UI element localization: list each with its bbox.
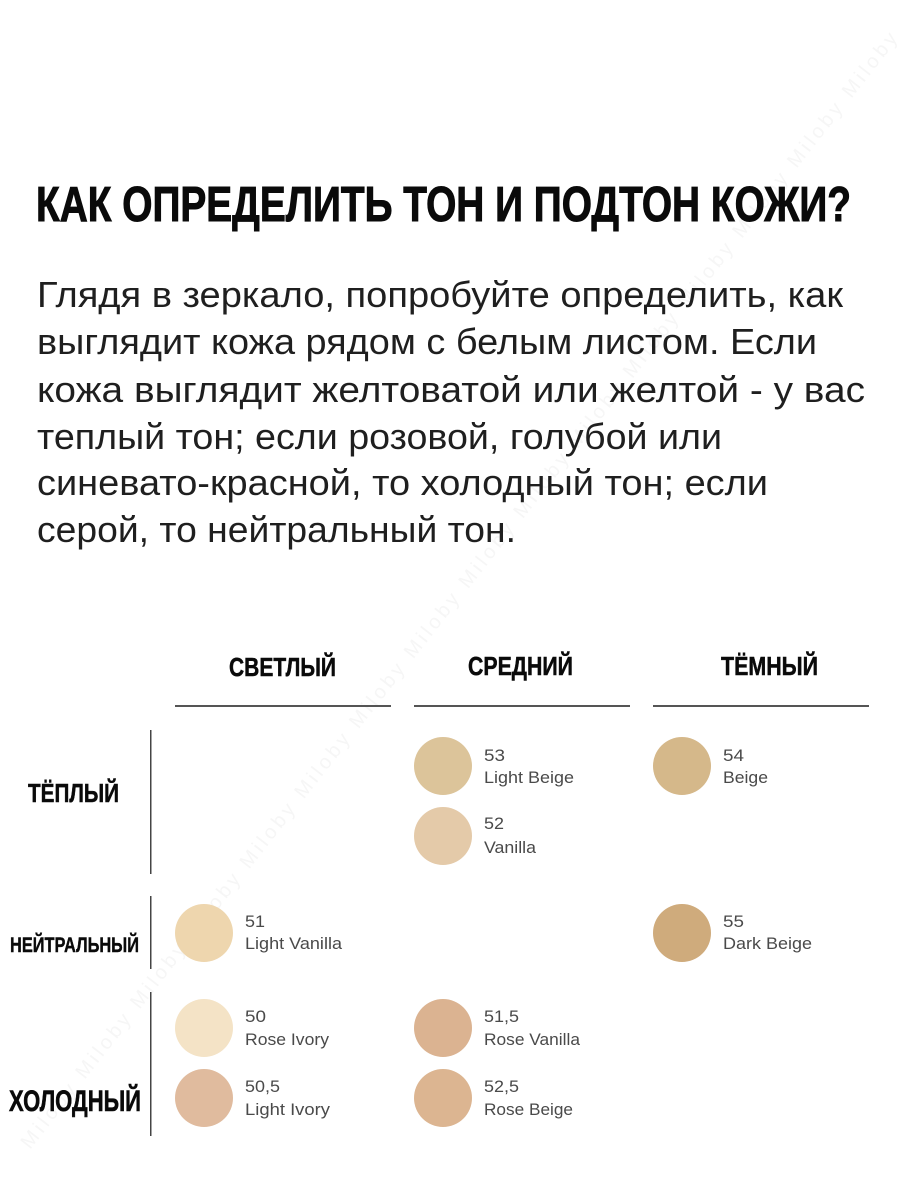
row header: холодный: ХОЛОДНЫЙ	[9, 1084, 141, 1118]
intro text block	[37, 274, 865, 550]
swatch: 53 Light Beige: 53	[484, 746, 505, 765]
swatch: 51,5 Rose Vanilla: 51,5	[484, 1007, 519, 1026]
swatch: 54 Beige	[653, 737, 768, 795]
swatch: 52 Vanilla: 52	[484, 814, 504, 833]
swatch: 51 Light Vanilla: 51	[245, 912, 265, 931]
swatch: 55 Dark Beige: Dark Beige	[723, 934, 812, 953]
intro text block: серой, то нейтральный тон.	[37, 509, 516, 550]
swatch: 50 Rose Ivory: 50	[245, 1007, 266, 1026]
intro text block: синевато-красной, то холодный тон; если	[37, 462, 768, 503]
swatch: 52 Vanilla: Vanilla	[484, 838, 537, 857]
swatch: 52,5 Rose Beige: 52,5	[484, 1077, 519, 1096]
intro text block: теплый тон; если розовой, голубой или	[37, 416, 722, 457]
swatch: 50,5 Light Ivory	[175, 1069, 331, 1127]
swatch: 51,5 Rose Vanilla: Rose Vanilla	[484, 1030, 581, 1049]
swatch: 53 Light Beige	[414, 737, 574, 795]
watermark: Miloby Miloby Miloby Miloby Miloby Miloby Miloby Miloby Miloby Miloby Miloby Miloby Miloby Miloby Miloby Miloby	[17, 28, 900, 1153]
swatch: 51 Light Vanilla	[175, 904, 343, 962]
swatch: 54 Beige: 54	[723, 746, 744, 765]
swatch: 50 Rose Ivory: Rose Ivory	[245, 1030, 330, 1049]
swatch: 50,5 Light Ivory: Light Ivory	[245, 1100, 331, 1119]
intro text block: Глядя в зеркало, попробуйте определить, как	[37, 274, 843, 315]
intro text block: кожа выглядит желтоватой или желтой - у вас	[37, 369, 865, 410]
row header: тёплый: ТЁПЛЫЙ	[28, 778, 119, 808]
intro text block: выглядит кожа рядом с белым листом. Если	[37, 321, 817, 362]
swatch: 51 Light Vanilla: Light Vanilla	[245, 934, 343, 953]
column header: средний: СРЕДНИЙ	[468, 651, 573, 681]
column header: светлый: СВЕТЛЫЙ	[229, 652, 336, 682]
swatch: 52,5 Rose Beige	[414, 1069, 573, 1127]
swatch: 55 Dark Beige	[653, 904, 812, 962]
swatch: 50,5 Light Ivory: 50,5	[245, 1077, 280, 1096]
swatch: 55 Dark Beige: 55	[723, 912, 744, 931]
swatch: 54 Beige: Beige	[723, 768, 768, 787]
swatch: 52,5 Rose Beige: Rose Beige	[484, 1100, 573, 1119]
swatch: 52 Vanilla	[414, 807, 537, 865]
row header: нейтральный: НЕЙТРАЛЬНЫЙ	[10, 933, 139, 957]
column header: тёмный: ТЁМНЫЙ	[721, 651, 818, 681]
swatch: 50 Rose Ivory	[175, 999, 330, 1057]
swatch: 51,5 Rose Vanilla	[414, 999, 581, 1057]
swatch: 53 Light Beige: Light Beige	[484, 768, 574, 787]
